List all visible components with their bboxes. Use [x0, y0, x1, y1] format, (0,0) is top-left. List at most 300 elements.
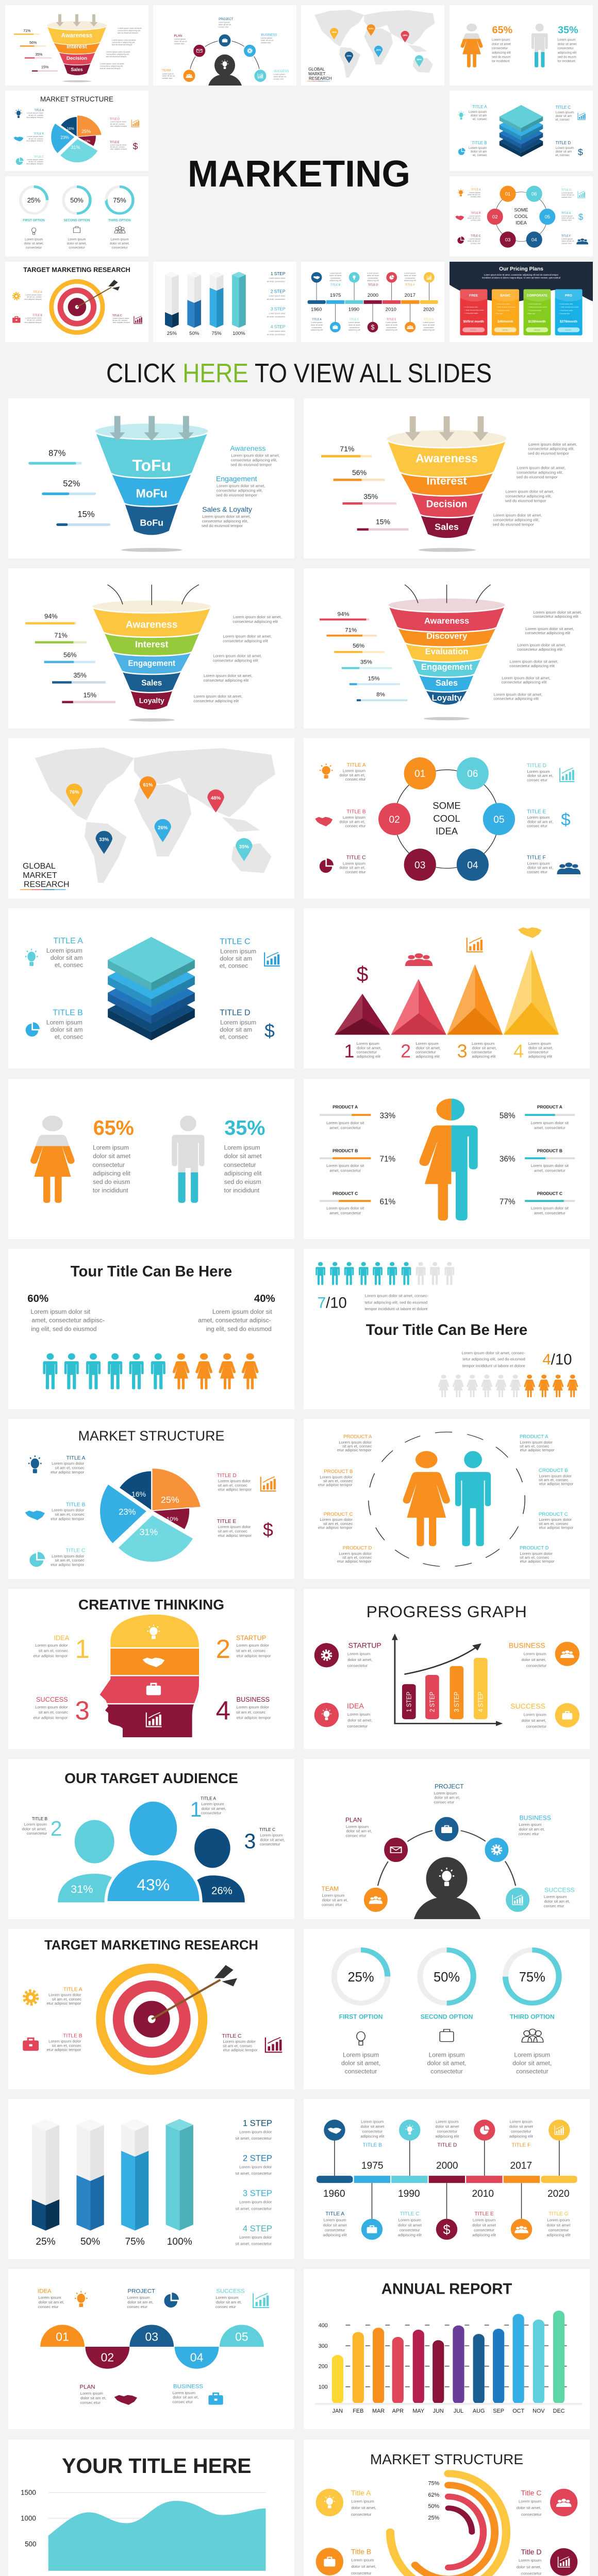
slide: percentage donuts: 25%: [347, 1970, 374, 1985]
percentage bars: 35%: [73, 671, 87, 679]
titles: TITLE B: [63, 2033, 82, 2039]
percentage bars: 8%: [376, 692, 385, 698]
titles: sit am et, consec: [52, 1997, 81, 2002]
labels: Lorem ipsum: [38, 2295, 61, 2300]
right titles: dolor sit am et,: [527, 819, 553, 824]
slide: annual report: JUN: [433, 2408, 444, 2414]
labels: consec etur: [346, 1834, 367, 1838]
slide: progress graph: dolor sit amet,: [521, 1657, 546, 1662]
labels: TITLE B: [32, 1817, 48, 1821]
slide: percentage donuts: Lorem ipsum: [514, 2052, 550, 2059]
left products: PRODUCT B: [333, 1149, 358, 1154]
slide: market structure pie: [8, 1419, 294, 1579]
slide: progress graph: 3 STEP: [453, 1692, 460, 1712]
arrows: [110, 416, 194, 441]
slide: 6-level funnel: Awareness: [424, 616, 469, 626]
slide: ToFu funnel: BoFu: [140, 517, 163, 528]
top icons: [324, 2120, 570, 2141]
left titles: TITLE A: [347, 762, 366, 768]
couple: [403, 1451, 491, 1546]
titles left: et, consec: [55, 961, 83, 969]
right titles: consec etur: [527, 824, 547, 828]
slide: target marketing research: TITLE C: [222, 2033, 241, 2039]
slide: world map: [8, 738, 294, 899]
top titles: consectetur: [362, 2129, 383, 2134]
right titles: Lorem ipsum: [527, 815, 550, 820]
slide: some cool idea: [304, 738, 590, 899]
steps right: BUSINESS: [237, 1696, 270, 1703]
percentage bars: [321, 445, 408, 531]
map: [35, 748, 275, 883]
slide: progress graph: [304, 1589, 590, 1749]
slide: target marketing research: etur adipisic tempor: [223, 2048, 258, 2053]
slide: products gender: 61%: [380, 1197, 396, 1206]
slide: percentage donuts: consectetur: [516, 2067, 549, 2075]
descriptions: [493, 610, 582, 701]
titles left: dolor sit am: [51, 1026, 82, 1033]
slide: 5-level funnel: Interest: [135, 639, 169, 650]
stage descriptions: Awareness: [230, 444, 265, 452]
titles: Lorem ipsum dolor: [48, 2039, 81, 2044]
slide: progress graph: Lorem ipsum: [524, 1713, 546, 1717]
slide: AIDA funnel: [304, 398, 590, 558]
slide: market structure arcs: 50%: [428, 2503, 440, 2510]
percentage bars: 15%: [376, 518, 390, 526]
steps right: 2: [216, 1634, 230, 1664]
labels: PLAN: [345, 1816, 362, 1823]
slide: 5-level funnel: [8, 568, 294, 728]
labels: Lorem ipsum: [127, 2295, 150, 2300]
left titles: sit am et, consec: [55, 1558, 85, 1563]
left products: Lorem ipsum dolor sit: [326, 1121, 364, 1125]
slide: some cool idea: SOME: [433, 800, 461, 811]
numbered notes: 1: [344, 1041, 354, 1061]
labels: consec etur: [172, 2400, 193, 2404]
titles: sit am et, consec: [52, 2043, 81, 2048]
descriptions: [193, 615, 281, 703]
slide: annual report: AUG: [473, 2408, 485, 2414]
slide: market structure arcs: consectetur: [521, 2512, 542, 2517]
top titles: Lorem ipsum: [436, 2120, 458, 2124]
percentage bars: 52%: [63, 479, 80, 488]
nodes: [363, 1816, 530, 1913]
label: GLOBAL: [23, 862, 56, 871]
left titles: consec etur: [345, 870, 366, 874]
steps right: etur adipisic tempor: [237, 1654, 271, 1658]
left titles: Lorem ipsum dolor: [52, 1554, 85, 1558]
slide: AIDA funnel: Interest: [426, 474, 467, 487]
steps right: sit am et, consec: [236, 1710, 265, 1715]
thumbnail: project hub: [153, 5, 296, 86]
labels: dolor sit am et,: [39, 2300, 64, 2304]
percentage bars: 71%: [54, 631, 68, 639]
option icons: [357, 2029, 543, 2045]
slide: AIDA funnel: Decision: [426, 499, 467, 510]
arrow: [152, 1965, 237, 2019]
left titles: dolor sit am et,: [339, 866, 366, 870]
slide: market structure arcs: 75%: [428, 2481, 440, 2487]
product labels: etur adipisic tempor: [337, 1448, 372, 1452]
steps left: sit am et, consec: [39, 1710, 68, 1715]
titles right: [220, 937, 256, 1041]
labels: consec etur: [127, 2304, 147, 2309]
bottom titles: adipiscing elit: [472, 2232, 496, 2237]
titles right: et, consec: [220, 962, 248, 969]
bottom titles: TITLE E: [474, 2211, 494, 2217]
slide: timeline: 1960: [323, 2189, 345, 2199]
bottom people row: [438, 1375, 578, 1397]
slide: couple cycle: etur adipisic tempor: [520, 1448, 555, 1452]
left titles: TITLE C: [65, 1548, 85, 1554]
timeline bar: [317, 2176, 577, 2183]
percentage bars: 15%: [84, 691, 96, 699]
product labels: PRODUCT D: [343, 1546, 372, 1551]
slide: layers: $: [264, 1021, 275, 1041]
slide: progress graph: Lorem ipsum: [524, 1652, 546, 1656]
steps right: sit am et, consec: [236, 1648, 265, 1653]
descriptions: Lorem ipsum dolor sit amet,: [534, 610, 582, 615]
labels: Lorem ipsum: [260, 1833, 283, 1837]
slide: pyramids: Lorem ipsum: [416, 1041, 439, 1046]
labels: Lorem ipsum: [201, 1802, 224, 1806]
descriptions: consectetur adipiscing elit: [509, 664, 555, 668]
top titles: dolor sit amet: [435, 2124, 459, 2129]
40% block: ing elit, sed do eiusmod: [206, 1325, 272, 1332]
right products: amet, consectetur: [534, 1168, 566, 1173]
product labels: [318, 1434, 372, 1564]
head: [414, 1857, 480, 1919]
slide: timeline: $: [443, 2223, 451, 2238]
titles left: Lorem ipsum: [46, 947, 82, 954]
numbered circles: 05: [493, 815, 505, 825]
right titles: sit am et, consec: [218, 1483, 247, 1487]
percentage bars: 35%: [360, 659, 372, 665]
arrows: [107, 585, 199, 605]
labels: [38, 2289, 245, 2405]
percentage bars: 15%: [368, 675, 380, 682]
labels: Lorem ipsum: [80, 2391, 103, 2396]
left titles: [339, 762, 366, 874]
slide: progress graph: 1 STEP: [405, 1692, 413, 1712]
steps right: etur adipisic tempor: [237, 1715, 271, 1720]
titles: etur adipisic tempor: [46, 2047, 81, 2052]
slide: pyramids: dolor sit amet,: [528, 1045, 553, 1050]
labels: dolor sit am et,: [173, 2395, 198, 2400]
slide: target marketing research: [8, 1929, 294, 2089]
60% block: ing elit, sed do eiusmod: [31, 1325, 97, 1332]
steps left: IDEA: [54, 1634, 70, 1641]
slide: market structure arcs: dolor sit amet,: [352, 2564, 376, 2569]
bottom titles: adipiscing elit: [546, 2232, 571, 2237]
labels: dolor sit am et,: [80, 2396, 106, 2400]
descriptions: Lorem ipsum dolor sit amet,: [525, 626, 574, 631]
steps right: [216, 1634, 271, 1725]
slide: 6-level funnel: Engagement: [421, 662, 473, 672]
labels: Lorem ipsum: [24, 1822, 47, 1826]
bottom titles: Lorem ipsum: [398, 2218, 421, 2223]
numbered notes: 3: [457, 1041, 467, 1061]
labels: [322, 1783, 575, 1908]
descriptions: [493, 442, 577, 527]
labels: TEAM: [322, 1885, 339, 1892]
slide: percentage donuts: dolor sit amet,: [341, 2059, 380, 2066]
top titles: TITLE B: [363, 2142, 382, 2148]
slide: market structure pie: 23%: [119, 1507, 136, 1517]
slide: progress graph: Lorem ipsum: [347, 1712, 370, 1717]
descriptions: Lorem ipsum dolor sit amet,: [510, 659, 558, 664]
stage descriptions: Lorem ipsum dolor sit amet,: [202, 514, 251, 519]
numbered notes: 2: [401, 1041, 411, 1061]
slide: pyramids: adipiscing elit: [472, 1054, 496, 1059]
labels: 3: [244, 1829, 256, 1853]
slide: 6-level funnel: [304, 568, 590, 728]
right titles: dolor sit am et,: [527, 773, 553, 778]
left titles: Lorem ipsum: [343, 861, 366, 866]
slide: 65% 35% figures: sed do eiusm: [93, 1178, 130, 1185]
numbered circles: 03: [414, 860, 425, 871]
thumbnail: funnel: [5, 5, 148, 86]
stems: [335, 2140, 559, 2219]
slide: tour title 7/10: Lorem ipsum dolor sit amet, consec-: [365, 1294, 428, 1298]
slide: tour title 7/10: tetur adipiscing elit, sed do eiusmod: [365, 1300, 427, 1304]
bottom titles: consectetur: [325, 2228, 345, 2232]
top titles: TITLE D: [437, 2142, 457, 2148]
bottom icons: [361, 2219, 532, 2240]
slide: market structure pie: MARKET STRUCTURE: [78, 1428, 224, 1444]
slide: tour title 7/10: Tour Title Can Be Here: [366, 1321, 527, 1338]
label: MARKET: [23, 871, 57, 880]
slide: market structure pie: 10%: [167, 1516, 178, 1522]
steps right: STARTUP: [236, 1634, 266, 1641]
numbered circles: 01: [414, 769, 425, 779]
pins: 26%: [158, 825, 168, 831]
slide: 3D bars: [8, 2099, 294, 2259]
slide: 65% 35% figures: 35%: [224, 1116, 265, 1139]
slide: market structure arcs: [304, 2439, 590, 2576]
labels: consec etur: [38, 2304, 59, 2309]
slide: progress graph: consectetur: [347, 1664, 368, 1668]
people row: [43, 1353, 259, 1389]
bars: [32, 2119, 193, 2231]
labels: Lorem ipsum: [173, 2391, 195, 2395]
funnel: [94, 423, 209, 536]
text: 65%: [93, 1116, 134, 1139]
descriptions: consectetur adipiscing elit,: [505, 494, 552, 498]
labels: dolor sit am et,: [346, 1829, 372, 1834]
descriptions: consectetur adipiscing elit: [223, 638, 269, 643]
slide: wave steps: 01: [56, 2330, 69, 2344]
arrows: [405, 585, 491, 603]
title: MARKETING: MARKETING: [188, 154, 410, 195]
labels: IDEA: [38, 2289, 52, 2295]
right titles: TITLE D: [527, 763, 546, 769]
titles left: Lorem ipsum: [46, 1019, 82, 1026]
slide: pyramids: dolor sit amet,: [416, 1045, 441, 1050]
descriptions: Lorem ipsum dolor sit amet,: [528, 442, 577, 447]
slide: market structure arcs: 25%: [428, 2515, 440, 2521]
titles left: [46, 937, 83, 1041]
slide: progress graph: 4 STEP: [477, 1692, 485, 1712]
slide: pyramids: Lorem ipsum: [472, 1041, 494, 1046]
slide: percentage donuts: Lorem ipsum: [428, 2052, 465, 2059]
numbered circles: 04: [467, 860, 478, 871]
right items: [550, 2489, 577, 2516]
descriptions: Lorem ipsum dolor sit amet,: [517, 466, 566, 470]
left titles: etur adipisc tempor: [51, 1563, 85, 1567]
slide: market structure arcs: Title C: [521, 2488, 542, 2497]
donuts: [334, 1950, 559, 2003]
slide: 65% 35% figures: dolor sit amet: [224, 1153, 262, 1160]
slide: your title here area chart: YOUR TITLE HERE: [62, 2454, 252, 2478]
60% block: [27, 1293, 105, 1332]
descriptions: Lorem ipsum dolor sit amet,: [213, 654, 262, 658]
slide: 3D bars: 50%: [80, 2236, 100, 2247]
slide: couple cycle: PRODUCT A: [520, 1434, 549, 1440]
slide: progress graph: STARTUP: [348, 1641, 381, 1650]
percentage bars: [28, 448, 110, 526]
descriptions: Lorem ipsum dolor sit amet,: [502, 675, 551, 680]
slide: couple cycle: sit am et, consec: [539, 1478, 569, 1482]
slide: progress graph: SUCCESS: [510, 1702, 545, 1710]
steps: Lorem ipsum dolor: [239, 2129, 272, 2134]
bars: [332, 2311, 564, 2404]
slide: percentage donuts: dolor sit amet,: [427, 2059, 467, 2066]
descriptions: Lorem ipsum dolor sit amet,: [506, 489, 554, 494]
slide: creative thinking: CREATIVE THINKING: [78, 1597, 224, 1613]
top titles: dolor sit amet: [509, 2124, 534, 2129]
bottom titles: adipiscing elit: [323, 2232, 347, 2237]
triangles: [335, 950, 559, 1035]
product labels: etur adipisic tempor: [318, 1525, 353, 1530]
split figure: [419, 1098, 483, 1221]
steps right: Lorem ipsum dolor: [236, 1643, 269, 1648]
pins: [66, 776, 253, 861]
labels: consectetur: [27, 1831, 47, 1836]
slide: target audience: 31%: [71, 1883, 93, 1895]
product labels: PRODUCT C: [324, 1512, 353, 1517]
40% block: amet, consectetur adipisc-: [198, 1317, 271, 1324]
labels: Lorem ipsum: [346, 1824, 369, 1829]
slide: annual report: FEB: [353, 2408, 363, 2414]
bottom titles: TITLE C: [400, 2211, 420, 2217]
steps: sit amet, consectetur: [235, 2171, 272, 2176]
top titles: TITLE F: [511, 2142, 530, 2148]
slide: market structure arcs: dolor sit amet,: [517, 2565, 541, 2569]
slide: some cool idea: $: [561, 810, 571, 829]
labels: PLAN: [80, 2384, 95, 2391]
left titles: etur adipisc tempor: [51, 1470, 85, 1475]
steps left: etur adipisic tempor: [34, 1654, 68, 1658]
right titles: [217, 1473, 252, 1538]
bottom titles: adipiscing elit: [398, 2232, 422, 2237]
funnel: [91, 600, 212, 710]
slide: percentage donuts: 75%: [519, 1970, 545, 1985]
percentage bars: 56%: [352, 468, 367, 477]
left products: PRODUCT C: [333, 1192, 358, 1196]
slide: ToFu funnel: ToFu: [132, 456, 171, 474]
slide: couple cycle: PRODUCT C: [539, 1512, 568, 1517]
right products: PRODUCT B: [537, 1149, 562, 1154]
thumbnail: market structure pie: [5, 91, 148, 171]
labels: dolor sit amet,: [202, 1806, 226, 1811]
slide: products gender: 36%: [500, 1155, 516, 1164]
slide: market structure arcs: dolor sit amet,: [352, 2505, 376, 2510]
slide: timeline: 2020: [547, 2189, 570, 2199]
thumbnail: gender percentages: [450, 5, 593, 86]
steps right: 4: [216, 1696, 230, 1725]
slide: percentage donuts: [304, 1929, 590, 2089]
pins: 35%: [239, 844, 249, 850]
slide: market structure arcs: Lorem ipsum: [351, 2499, 374, 2503]
stage descriptions: consectetur adipiscing elit,: [231, 457, 277, 462]
funnel: [386, 430, 507, 538]
right products: PRODUCT A: [537, 1105, 562, 1109]
stage descriptions: Engagement: [216, 474, 257, 483]
numbered circles: 06: [467, 769, 478, 779]
man figure: [172, 1115, 205, 1203]
slide: market structure pie: 25%: [161, 1495, 179, 1505]
slide: annual report: 400: [319, 2323, 328, 2329]
slide: target marketing research: Lorem ipsum dolor: [223, 2039, 256, 2044]
product labels: Lorem ipsum dolor: [320, 1517, 353, 1522]
bottom titles: dolor sit amet: [472, 2223, 496, 2227]
pie chart: [99, 1468, 201, 1562]
slide: 5-level funnel: Sales: [141, 679, 162, 688]
labels: dolor sit am et,: [519, 1827, 545, 1832]
left titles: TITLE B: [66, 1502, 86, 1508]
steps: Lorem ipsum dolor: [239, 2200, 272, 2205]
top titles: consectetur: [511, 2129, 531, 2134]
left titles: sit am et, consec: [55, 1466, 85, 1470]
right titles: consec etur: [527, 870, 547, 874]
labels: BUSINESS: [520, 1815, 551, 1822]
stage descriptions: Lorem ipsum dolor sit amet,: [231, 453, 280, 457]
waves: [40, 2325, 264, 2369]
titles right: dolor sit am: [220, 955, 252, 962]
top titles: consectetur: [437, 2129, 457, 2134]
slide: couple cycle: sit am et, consec: [520, 1444, 550, 1448]
steps left: 1: [75, 1634, 90, 1664]
labels: TITLE A: [201, 1797, 217, 1801]
product labels: etur adipisic tempor: [318, 1483, 353, 1487]
arrow ring: [369, 1432, 525, 1567]
descriptions: consectetur adipiscing elit: [533, 614, 579, 619]
left products: amet, consectetur: [329, 1126, 361, 1130]
left items: [316, 2489, 343, 2516]
titles left: TITLE B: [53, 1009, 83, 1018]
slide: AIDA funnel: Awareness: [416, 451, 478, 465]
labels: PROJECT: [127, 2289, 155, 2295]
60% block: Lorem ipsum dolor sit: [30, 1308, 91, 1315]
slide: products gender: [304, 1079, 590, 1239]
descriptions: consectetur adipiscing elit: [517, 647, 562, 652]
slide: market structure pie: 31%: [139, 1527, 158, 1537]
axes: [395, 1637, 499, 1723]
slide: timeline: [304, 2099, 590, 2259]
slide: project hub: [304, 1759, 590, 1919]
slide: 65% 35% figures: sed do eiusm: [224, 1178, 261, 1185]
60% block: amet, consectetur adipisc-: [31, 1317, 105, 1324]
thumbnail: layers: [450, 91, 593, 171]
slide: couple cycle: PRODUCT D: [520, 1546, 549, 1551]
slide: annual report: MAR: [372, 2408, 385, 2414]
steps: 1 STEP: [243, 2118, 272, 2128]
slide: 65% 35% figures: [8, 1079, 294, 1239]
slide: 5-level funnel: Engagement: [128, 659, 175, 668]
descriptions: sed do eiusmod tempor: [493, 522, 534, 527]
slide: tour title 7/10: tempor incididunt ut labore et dolore: [462, 1363, 525, 1368]
slide: annual report: 300: [319, 2343, 328, 2349]
